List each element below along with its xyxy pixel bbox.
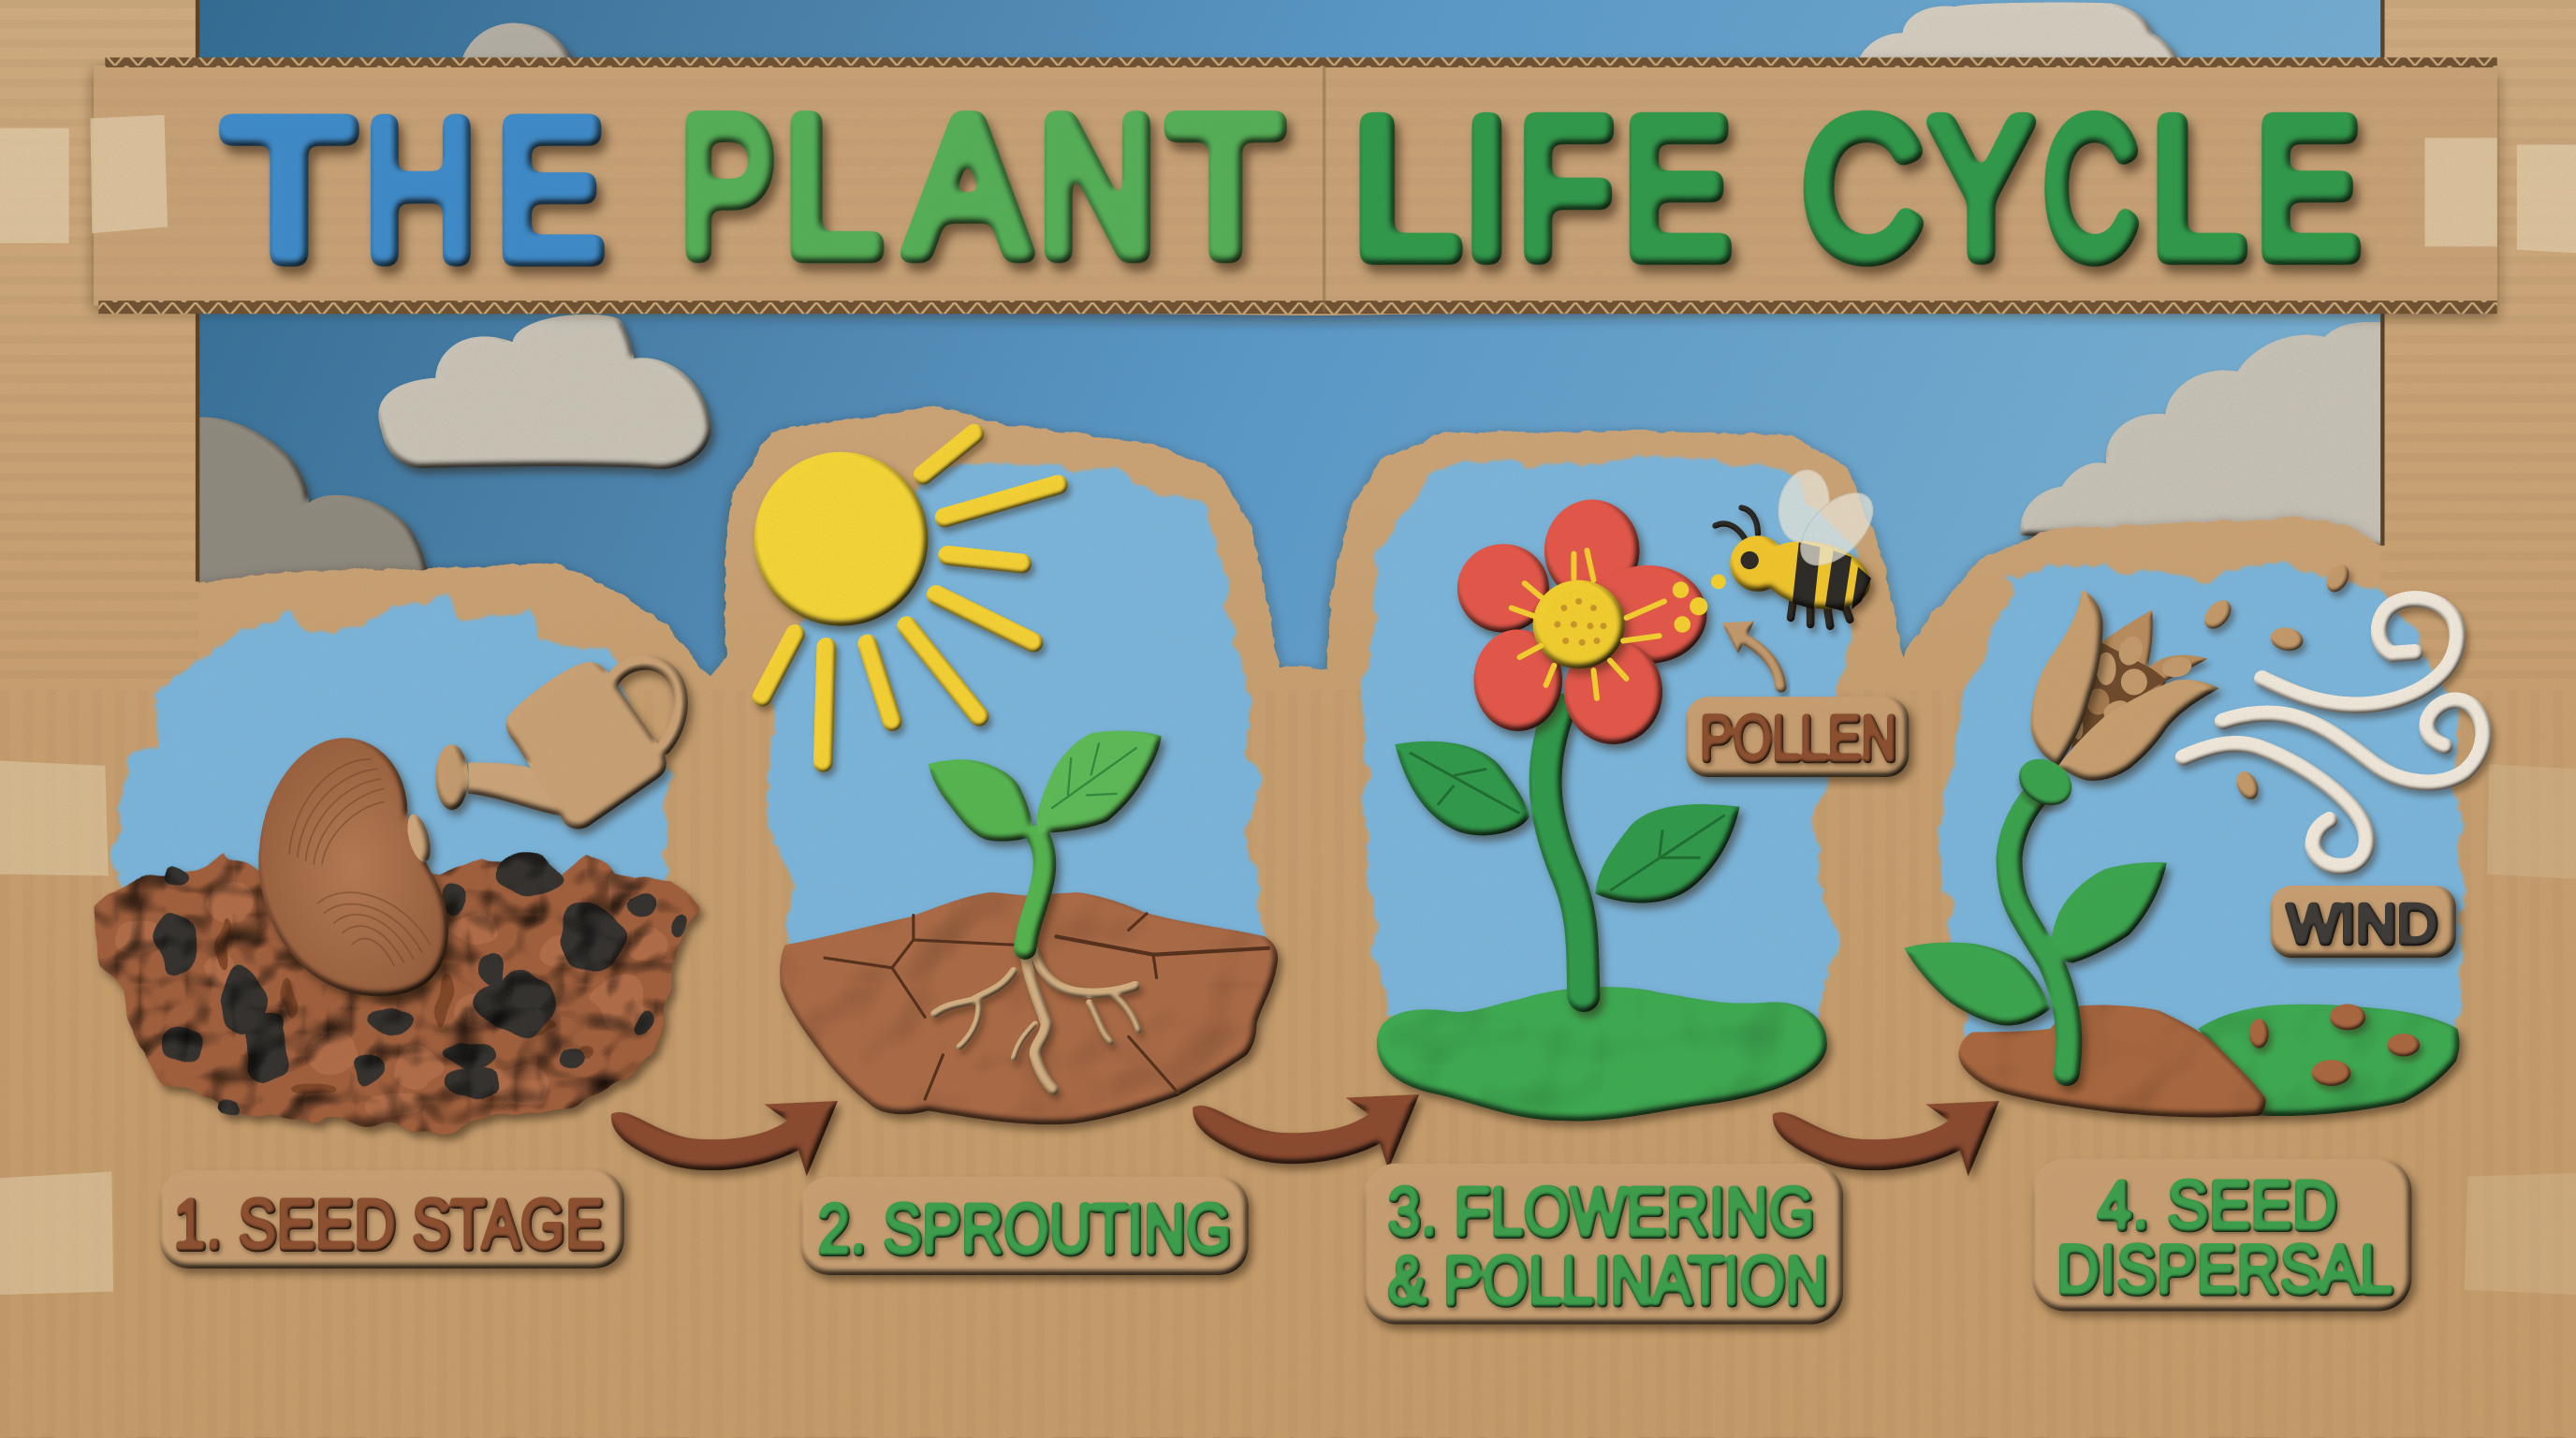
title text: L bbox=[2150, 78, 2246, 299]
title text: E bbox=[2256, 78, 2361, 299]
green ground bbox=[1377, 987, 1827, 1122]
label: 2. sprouting: 2. SPROUTING bbox=[818, 1190, 1232, 1269]
cloud: top left bbox=[460, 22, 574, 66]
painted sky patch 4 bbox=[1937, 559, 2463, 1043]
tape: bottom right bbox=[2465, 1173, 2576, 1295]
label: 3. flowering and pollination: & POLLINATION bbox=[1388, 1242, 1828, 1320]
title text: A bbox=[907, 76, 1029, 297]
label: 3. flowering and pollination: 3. FLOWERING bbox=[1388, 1173, 1815, 1251]
title text: I bbox=[1464, 78, 1510, 299]
sun with rays bbox=[754, 433, 1058, 762]
cloud: right bbox=[2020, 322, 2398, 550]
soil mound bbox=[97, 851, 695, 1132]
title text: E bbox=[1623, 78, 1732, 299]
tape: banner right bbox=[2425, 138, 2576, 253]
label: 4. seed dispersal bbox=[2032, 1158, 2411, 1312]
title text: T bbox=[1168, 76, 1283, 297]
tape strips bbox=[0, 761, 2576, 1295]
tape: lower left bbox=[0, 761, 109, 875]
ground: soil and grass bbox=[1958, 1004, 2460, 1118]
flower stem and leaves bbox=[1395, 710, 1740, 996]
label: 1. seed stage bbox=[159, 1170, 624, 1269]
wind label: WIND bbox=[2287, 892, 2438, 955]
panel 3: flowering and pollination bbox=[1362, 457, 1909, 1122]
watering can bbox=[435, 662, 681, 829]
sprout stem and leaves bbox=[929, 730, 1162, 948]
ground seeds bbox=[2249, 1004, 2420, 1086]
grass bbox=[2198, 1005, 2460, 1116]
tape: middle right bbox=[2487, 764, 2576, 879]
sprout leaf veins bbox=[1051, 742, 1137, 809]
soil mound with cracks bbox=[780, 892, 1278, 1124]
arrows between stages bbox=[611, 1094, 1999, 1177]
title text: T bbox=[224, 80, 355, 301]
calyx bbox=[2011, 750, 2080, 814]
painted sky patch 3 bbox=[1362, 457, 1855, 1019]
banner tapes bbox=[0, 115, 2576, 253]
sun disc bbox=[754, 452, 929, 626]
painted sky patch 2 bbox=[768, 460, 1268, 970]
bee bbox=[1715, 466, 1885, 626]
title banner bbox=[94, 57, 2497, 315]
pod seeds bbox=[2073, 633, 2193, 740]
title text: P bbox=[681, 76, 775, 297]
clouds bbox=[181, 2, 2398, 594]
label: 4. seed dispersal: 4. SEED bbox=[2098, 1167, 2338, 1244]
panel 1: seed stage bbox=[97, 594, 695, 1132]
label: 1. seed stage: 1. SEED STAGE bbox=[174, 1185, 605, 1264]
flower stamens and spots bbox=[1512, 550, 1726, 698]
flying seeds bbox=[2199, 561, 2354, 803]
title text: E bbox=[496, 80, 605, 301]
flower head bbox=[1457, 500, 1707, 744]
panel 2: sprouting bbox=[754, 433, 1278, 1124]
cloud: far left dark bbox=[181, 417, 431, 594]
seed pod bbox=[2030, 590, 2219, 781]
arrow: stage 1 to 2 bbox=[611, 1101, 838, 1177]
cardboard side columns bbox=[0, 0, 2576, 690]
seed fingerprint lines bbox=[289, 759, 431, 966]
pollen label: POLLEN bbox=[1701, 703, 1897, 775]
wind swirls bbox=[2184, 599, 2483, 866]
cloud: top right bbox=[1856, 2, 2180, 66]
title text: C bbox=[1802, 78, 1924, 299]
tape: banner left bbox=[0, 115, 168, 243]
tape: bottom left bbox=[0, 1171, 113, 1295]
lower cardboard panels bbox=[0, 406, 2576, 1438]
panel 4: seed dispersal bbox=[1904, 559, 2483, 1118]
label: 3. flowering and pollination bbox=[1364, 1164, 1843, 1325]
sprout roots bbox=[935, 948, 1138, 1090]
label: 4. seed dispersal: DISPERSAL bbox=[2056, 1230, 2393, 1308]
wind label bbox=[2271, 886, 2456, 958]
seed bbox=[258, 738, 448, 996]
title text: L bbox=[1352, 78, 1460, 299]
cloud: centre left bbox=[378, 315, 711, 469]
cardboard corrugation bbox=[0, 690, 2576, 1438]
soil cracks bbox=[825, 914, 1268, 1099]
sky window bbox=[165, 0, 2415, 707]
title text: C bbox=[2043, 78, 2139, 299]
title text bbox=[224, 76, 2361, 301]
title text: F bbox=[1518, 78, 1614, 299]
sun rays bbox=[762, 433, 1058, 762]
title text: Y bbox=[1928, 78, 2034, 299]
title text: L bbox=[783, 76, 882, 297]
pollen arrow bbox=[1721, 621, 1781, 687]
lower cardboard body bbox=[0, 687, 2576, 1438]
title text: H bbox=[365, 80, 476, 301]
leaf veins bbox=[1410, 753, 1725, 890]
title text: N bbox=[1038, 76, 1157, 297]
soil bbox=[1958, 1005, 2266, 1118]
stem and leaves bbox=[1904, 795, 2167, 1073]
painted sky patch 1 bbox=[113, 594, 668, 936]
bee wings bbox=[1773, 466, 1885, 578]
banner board bbox=[94, 59, 2497, 315]
label: 2. sprouting bbox=[800, 1177, 1249, 1275]
arrow: stage 3 to 4 bbox=[1773, 1101, 1999, 1177]
arrow: stage 2 to 3 bbox=[1193, 1094, 1419, 1170]
